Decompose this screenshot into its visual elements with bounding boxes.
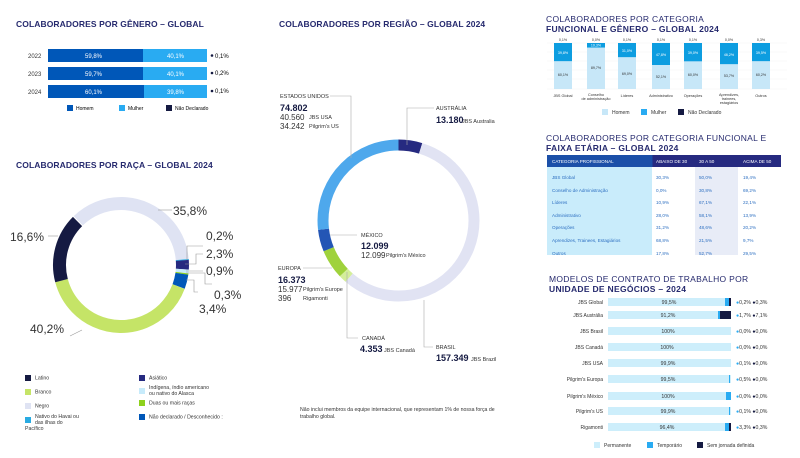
table: category age: 0,0%	[656, 188, 666, 193]
chart: gender bars: 2022	[28, 54, 42, 60]
chart: category gender stacked bars: de administração	[582, 97, 610, 101]
table: category age: 10,9%	[656, 200, 669, 205]
title: category gender: COLABORADORES POR CATEGORIA	[546, 14, 704, 24]
chart: race donut: 40,2%	[30, 322, 64, 336]
table: category age	[547, 155, 781, 256]
title: category gender: FUNCIONAL E GÊNERO – GLOBAL 2024	[546, 24, 719, 34]
chart: contract bars: JBS Global	[578, 300, 603, 306]
legend: race: Latino	[35, 375, 49, 381]
chart: contract bars: ●0,2% ●0,3%	[736, 300, 768, 306]
table: category age: 67,1%	[699, 200, 712, 205]
chart: gender bars: 60,1%	[85, 90, 103, 96]
chart: category gender stacked bars: 39,0%	[688, 51, 699, 55]
table: category age: Aprendizes, Trainees, Estagiários	[552, 238, 620, 243]
table: category age: ACIMA DE 50	[743, 159, 771, 164]
chart: gender bars: 40,1%	[167, 72, 185, 78]
table: category age: 58,1%	[699, 213, 712, 218]
chart: category gender stacked bars: 0,0%	[725, 38, 734, 42]
title: contract	[549, 274, 748, 294]
chart: region donut: 74.802	[280, 103, 308, 113]
table: category age: JBS Global	[552, 175, 575, 180]
chart: contract bars: ●0,0% ●0,0%	[736, 345, 768, 351]
title: category age	[546, 133, 766, 153]
chart: region donut: 16.373	[278, 275, 306, 285]
chart: category gender stacked bars: 52,1%	[656, 75, 667, 79]
chart: race donut: 3,4%	[199, 302, 227, 316]
chart: category gender stacked bars: trainees,	[722, 97, 736, 101]
table: category age: Administrativo	[552, 213, 581, 218]
title: category age: COLABORADORES POR CATEGORIA FUNCIONAL E	[546, 133, 766, 143]
table: category age: 13,9%	[743, 213, 756, 218]
text: das ilhas do Pacífico	[25, 420, 63, 432]
chart: region donut: JBS Australia	[462, 119, 496, 125]
title: contract: UNIDADE DE NEGÓCIOS – 2024	[549, 284, 686, 294]
chart: category gender stacked bars: 0,1%	[623, 38, 632, 42]
chart: race donut: 0,2%	[206, 229, 234, 243]
chart: region donut: AUSTRÁLIA	[436, 105, 467, 112]
chart: category gender stacked bars: Mulher	[651, 110, 667, 116]
chart: race donut: 16,6%	[10, 230, 44, 244]
chart: category gender stacked bars: 53,7%	[724, 74, 735, 78]
chart: category gender stacked bars: 0,3%	[757, 38, 766, 42]
chart: category gender stacked bars: estagiários	[720, 101, 738, 105]
chart: region donut: 12.099	[361, 241, 389, 251]
chart: contract bars: Rigamonti	[580, 425, 603, 431]
chart: contract bars: 99,9%	[661, 409, 676, 415]
chart: region donut: CANADÁ	[362, 335, 385, 342]
chart: contract bars: Permanente	[604, 443, 631, 449]
legend: race	[25, 375, 223, 432]
chart: gender bars: 40,1%	[167, 54, 185, 60]
title: gender: COLABORADORES POR GÊNERO – GLOBAL	[16, 19, 204, 29]
table: category age: Líderes	[552, 200, 567, 205]
chart: category gender stacked bars: Aprendizes,	[719, 93, 739, 97]
chart: contract bars: Pilgrim's México	[567, 394, 603, 400]
table: category age: 28,0%	[656, 213, 669, 218]
chart: contract bars: 96,4%	[660, 425, 675, 431]
chart: gender bars: 0,2%	[215, 71, 229, 77]
chart: region donut	[278, 94, 496, 363]
table: category age: CATEGORIA PROFISSIONAL	[552, 159, 614, 164]
chart: region donut: 34.242	[280, 122, 305, 131]
chart: contract bars: 99,5%	[661, 377, 676, 383]
table: category age: ABAIXO DE 30	[656, 159, 687, 164]
table: category age: 30 A 50	[699, 159, 714, 164]
table: category age: 52,7%	[699, 251, 712, 256]
table: category age: 31,2%	[656, 225, 669, 230]
chart: contract bars: 100%	[661, 394, 675, 400]
chart: category gender stacked bars: 69,0%	[622, 72, 633, 76]
chart: region donut: Pilgrim's Europe	[303, 287, 343, 293]
chart: contract bars: Pilgrim's Europa	[567, 377, 603, 383]
chart: category gender stacked bars: 0,1%	[559, 38, 568, 42]
title: category age: FAIXA ETÁRIA – GLOBAL 2024	[546, 143, 679, 153]
table: category age: 48,6%	[699, 225, 712, 230]
chart: category gender stacked bars: 89,7%	[591, 66, 602, 70]
chart: contract bars: ●0,0% ●0,0%	[736, 394, 768, 400]
table: category age: 20,2%	[743, 225, 756, 230]
table: category age: 69,2%	[743, 188, 756, 193]
chart: gender bars: Homem	[76, 106, 94, 112]
chart: contract bars: JBS Brasil	[580, 329, 603, 335]
chart: contract bars: 99,5%	[662, 300, 677, 306]
table: category age: 21,5%	[699, 238, 712, 243]
chart: gender bars: 0,1%	[215, 89, 229, 95]
chart: region donut: EUROPA	[278, 266, 301, 272]
table: category age: 29,5%	[743, 251, 756, 256]
chart: contract bars: Pilgrim's US	[576, 409, 604, 415]
chart: category gender stacked bars: 39,5%	[756, 51, 767, 55]
chart: gender bars: 59,8%	[85, 54, 103, 60]
chart: region donut: Rigamonti	[303, 296, 328, 302]
chart: region donut: 4.353	[360, 344, 383, 354]
chart: category gender stacked bars: 39,8%	[558, 51, 569, 55]
chart: contract bars: ●0,5% ●0,0%	[736, 377, 768, 383]
chart: category gender stacked bars: 60,1%	[558, 73, 569, 77]
chart: gender bars	[28, 49, 229, 112]
chart: contract bars: 99,9%	[661, 361, 676, 367]
chart: region donut: JBS USA	[309, 115, 332, 121]
legend: race: Nativo do Havai ou	[35, 414, 79, 420]
legend: race: Branco	[35, 389, 51, 395]
chart: category gender stacked bars: 60,0%	[688, 73, 699, 77]
chart: race donut: 2,3%	[206, 247, 234, 261]
legend: race: Indígena, índio americano	[149, 385, 209, 391]
chart: contract bars: ●3,3% ●0,3%	[736, 425, 768, 431]
chart: category gender stacked bars: Líderes	[621, 94, 633, 98]
chart: gender bars: Não Declarado	[175, 106, 209, 112]
chart: region donut: 40.560	[280, 113, 305, 122]
chart: category gender stacked bars: 0,1%	[657, 38, 666, 42]
chart: region donut: JBS Brazil	[471, 357, 496, 363]
chart: contract bars: ●0,0% ●0,0%	[736, 329, 768, 335]
chart: category gender stacked bars: 0,0%	[592, 38, 601, 42]
chart: category gender stacked bars: 10,3%	[591, 44, 602, 48]
chart: contract bars: JBS Canadá	[575, 345, 603, 351]
chart: contract bars: Temporário	[657, 443, 682, 449]
chart: category gender stacked bars: Administrativo	[649, 94, 673, 98]
table: category age: 68,8%	[656, 238, 669, 243]
title: contract: MODELOS DE CONTRATO DE TRABALHO POR	[549, 274, 748, 284]
footnote: region: Não inclui membros da equipe internacional, que representam 1% de nossa força de trabalho global.	[300, 407, 495, 420]
chart: race donut: 0,3%	[214, 288, 242, 302]
chart: category gender stacked bars: Homem	[612, 110, 630, 116]
chart: category gender stacked bars: Não Declarado	[688, 110, 722, 116]
title: region: COLABORADORES POR REGIÃO – GLOBAL 2024	[279, 19, 485, 29]
chart: category gender stacked bars: 0,1%	[689, 38, 698, 42]
table: category age: Operações	[552, 225, 574, 230]
chart: contract bars: ●0,1% ●0,0%	[736, 361, 768, 367]
table: category age: 30,8%	[699, 188, 712, 193]
chart: contract bars: JBS Austrália	[573, 313, 603, 319]
legend: race: Negro	[35, 403, 49, 409]
chart: contract bars: 100%	[660, 345, 674, 351]
chart: gender bars: 2023	[28, 72, 42, 78]
table: category age: Outros	[552, 251, 566, 256]
chart: region donut: 396	[278, 294, 292, 303]
chart: contract bars: ●0,1% ●0,0%	[736, 409, 768, 415]
legend: race: ou nativo do Alasca	[149, 391, 194, 397]
chart: category gender stacked bars: 46,2%	[724, 53, 735, 57]
chart: contract bars: ●1,7% ●7,1%	[736, 313, 768, 319]
chart: region donut: Pilgrim's México	[386, 253, 426, 259]
chart: race donut	[10, 197, 242, 336]
table: category age: 17,8%	[656, 251, 669, 256]
chart: category gender stacked bars: Operações	[684, 94, 702, 98]
chart: category gender stacked bars: 31,0%	[622, 49, 633, 53]
chart: category gender stacked bars: 47,8%	[656, 53, 667, 57]
table: category age: Conselho de Administração	[552, 188, 608, 193]
table: category age: 9,7%	[743, 238, 753, 243]
title: race: COLABORADORES POR RAÇA – GLOBAL 2024	[16, 160, 213, 170]
chart: category gender stacked bars: 60,2%	[756, 73, 767, 77]
chart: category gender stacked bars	[554, 38, 770, 116]
chart: region donut: BRASIL	[436, 345, 456, 351]
chart: region donut: JBS Canadá	[384, 348, 416, 354]
chart: region donut: Pilgrim's US	[309, 124, 339, 130]
chart: category gender stacked bars: JBS Global	[554, 94, 573, 98]
chart: race donut: 0,9%	[206, 264, 234, 278]
table: category age: 22,1%	[743, 200, 756, 205]
table: category age: 19,4%	[743, 175, 756, 180]
chart: region donut: ESTADOS UNIDOS	[280, 94, 329, 100]
chart: region donut: 15.977	[278, 285, 303, 294]
chart: contract bars: 100%	[661, 329, 675, 335]
chart: gender bars: 0,1%	[215, 54, 229, 60]
legend: race: Não declarado / Desconhecido :	[149, 414, 223, 420]
chart: region donut: 157.349	[436, 353, 469, 363]
title: category gender	[546, 14, 719, 34]
legend: race: Duas ou mais raças	[149, 400, 195, 406]
chart: gender bars: 2024	[28, 90, 42, 96]
chart: category gender stacked bars: Conselho	[588, 93, 604, 97]
chart: region donut: MÉXICO	[361, 232, 383, 239]
table: category age: 50,0%	[699, 175, 712, 180]
table: category age: 30,3%	[656, 175, 669, 180]
chart: gender bars: 39,8%	[167, 90, 185, 96]
chart: gender bars: Mulher	[128, 106, 144, 112]
chart: region donut: 13.180	[436, 115, 464, 125]
chart: contract bars: 91,2%	[661, 313, 676, 319]
legend: race: Asiático	[149, 375, 167, 381]
chart: contract bars: JBS USA	[582, 361, 604, 367]
chart: race donut: 35,8%	[173, 204, 207, 218]
chart: category gender stacked bars: Outros	[755, 94, 767, 98]
chart: region donut: 12.099	[361, 251, 386, 260]
chart: gender bars: 59,7%	[85, 72, 103, 78]
chart: contract bars	[567, 298, 768, 449]
chart: contract bars: Sem jornada definida	[707, 443, 754, 449]
